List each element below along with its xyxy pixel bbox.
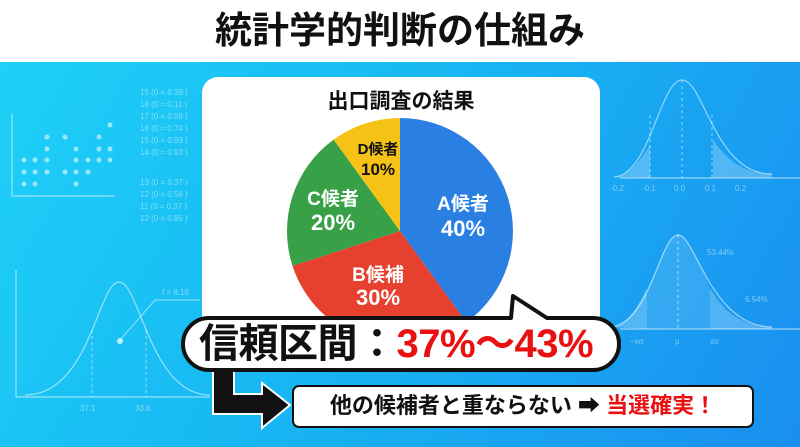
background decorations: 37.1 (80, 404, 96, 413)
background decorations: 6.54% (745, 295, 768, 304)
background decorations: -0.1 (642, 184, 656, 193)
background decorations: 18 (0 = 0.11 ) (140, 100, 188, 109)
background decorations: -0.2 (610, 184, 624, 193)
background decorations: 15 (0 = 0.93 ) (140, 136, 188, 145)
background decorations: 0.0 (674, 184, 686, 193)
background decorations: 0.2 (735, 184, 747, 193)
background decorations: 14 (0 = 0.93 ) (140, 148, 188, 157)
pie chart: 40% (441, 216, 485, 241)
background decorations: −xσ (630, 337, 644, 346)
text block: conclusion: 他の候補者と重ならない ➡ 当選確実！ (330, 393, 716, 418)
background decorations: 12 (0 = 0.85 ) (140, 214, 188, 223)
background decorations: 15 (0 = 0.39 ) (140, 88, 188, 97)
background decorations: 53.44% (707, 248, 734, 257)
pie chart: C候者 (307, 188, 359, 210)
background decorations: 0.1 (705, 184, 717, 193)
pie chart: 30% (356, 285, 400, 310)
card heading: 出口調査の結果 (328, 90, 474, 113)
title bar: 統計学的判断の仕組み (215, 10, 585, 51)
background decorations: 12 (0 = 0.58 ) (140, 190, 188, 199)
pie chart: D候者 (358, 140, 398, 158)
background decorations: 16 (0 = 0.74 ) (140, 124, 188, 133)
callout: confidence interval bubble (181, 294, 621, 372)
background decorations: xσ (710, 337, 719, 346)
panel: exit poll card (202, 77, 600, 347)
pie chart: 20% (311, 210, 355, 235)
background decorations: 33.8 (135, 404, 151, 413)
callout: confidence interval bubble: 信頼区間：37%〜43% (199, 322, 593, 366)
background decorations: f = 8.16 (162, 288, 189, 297)
pie chart: 10% (361, 160, 395, 179)
background decorations: μ (675, 337, 680, 346)
background decorations: 17 (0 = 0.88 ) (140, 112, 188, 121)
pie chart: B候補 (352, 264, 404, 286)
text block: conclusion (292, 385, 754, 428)
background decorations: 13 (0 = 0.37 ) (140, 178, 188, 187)
title bar (0, 0, 800, 62)
background decorations: 11 (0 = 0.37 ) (140, 202, 188, 211)
pie chart: A候者 (437, 193, 489, 215)
